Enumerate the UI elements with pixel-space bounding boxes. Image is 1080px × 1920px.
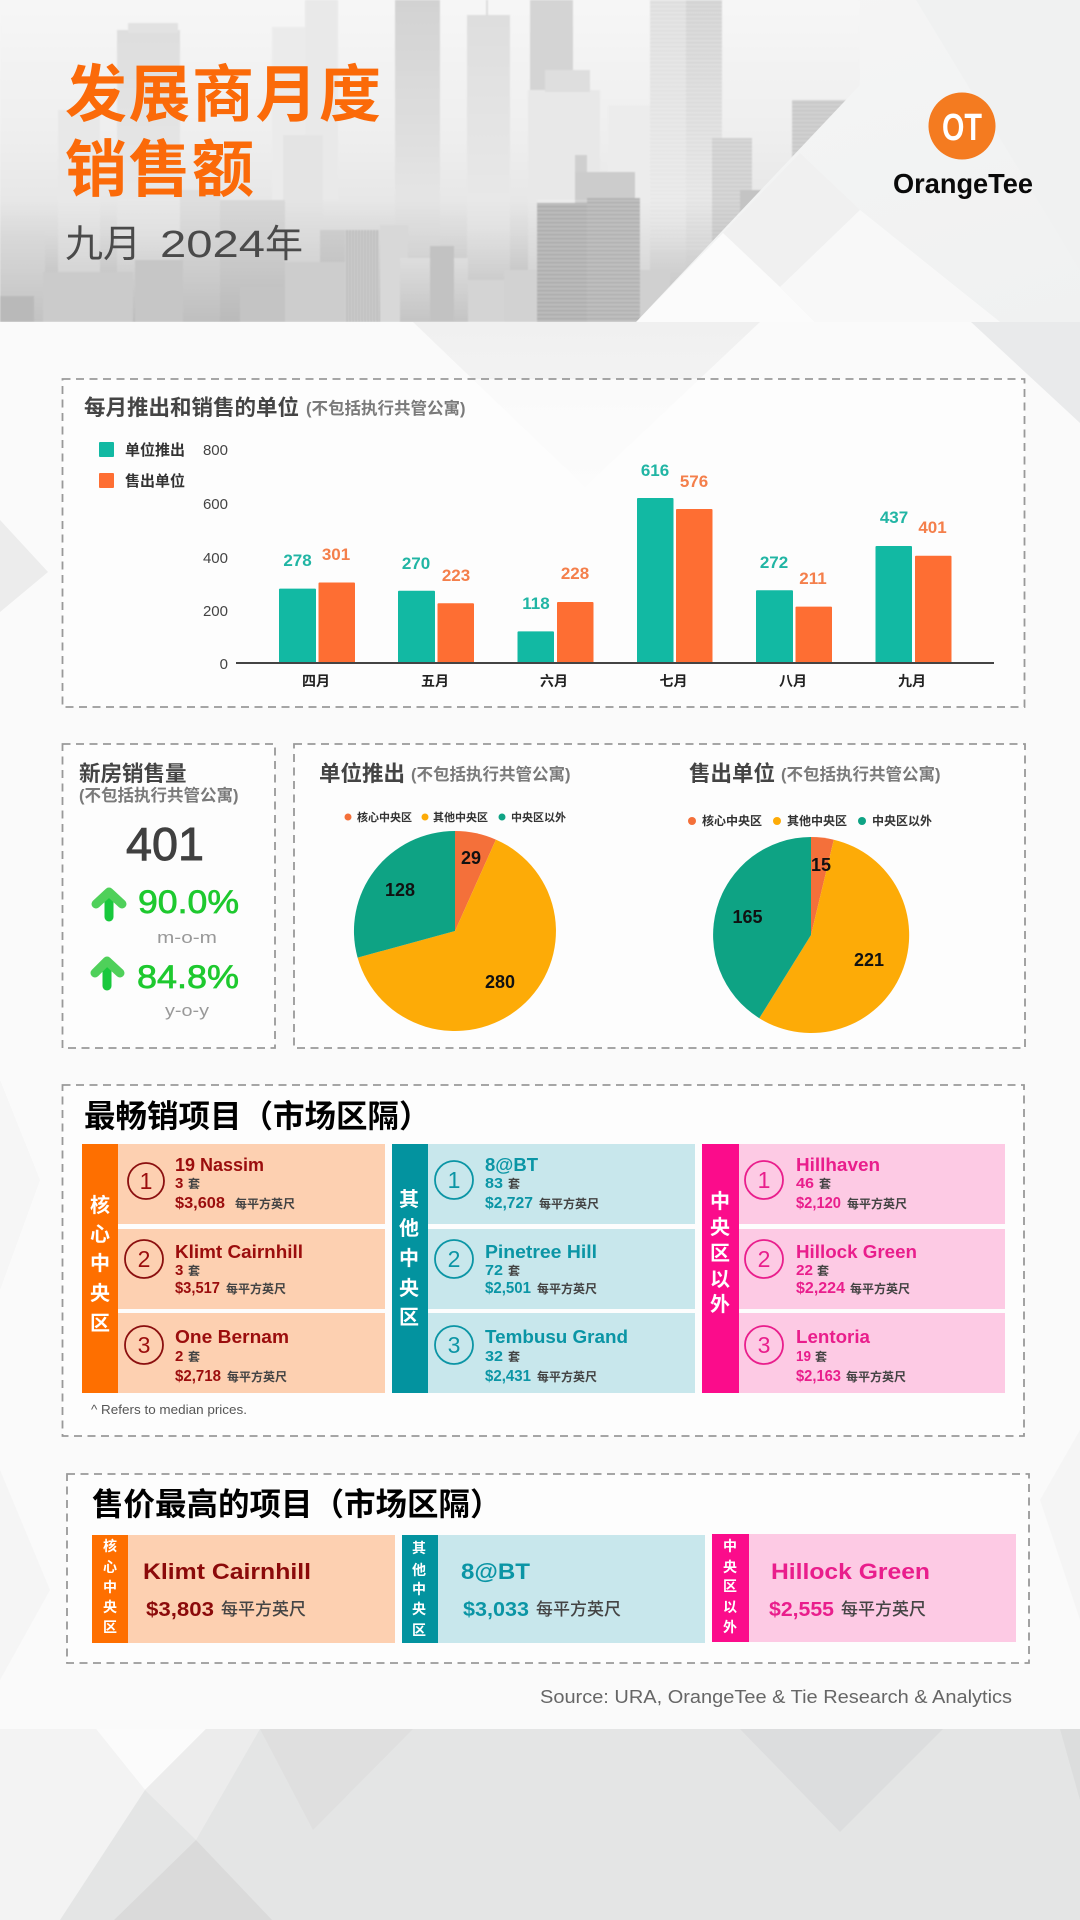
stat: year on year change: 84.8% (137, 959, 239, 995)
bar chart: 七月 (660, 671, 688, 691)
row: Pinetree Hill: 2 (448, 1246, 460, 1272)
row: Lentoria: 每平方英尺 (846, 1368, 906, 1385)
row: Tembusu Grand: Tembusu Grand (485, 1327, 628, 1347)
sidebar label: 区 (412, 1620, 426, 1640)
panel: top selling projects by market segment (62, 1085, 1024, 1436)
chart legend: 售出单位 (125, 470, 185, 491)
sidebar label: 核 (103, 1536, 117, 1556)
heading: new home sales (79, 757, 238, 805)
bar chart: 437 (880, 508, 908, 527)
stat: month on month change: m-o-m (157, 928, 217, 947)
sidebar label: 中 (710, 1185, 730, 1214)
sidebar label: 心 (103, 1557, 117, 1577)
row: 19 Nassim: 1 (140, 1168, 152, 1194)
bar chart: 301 (322, 545, 350, 564)
bottom band pattern (0, 1729, 1080, 1920)
heading: sold units pie: (不包括执行共管公寓) (781, 764, 940, 784)
row: Tembusu Grand: 套 (508, 1348, 520, 1365)
pie chart: sold units: 165 (732, 907, 763, 927)
row: 19 Nassim: $3,608 (175, 1195, 225, 1212)
row: Hillhaven: Hillhaven (796, 1155, 880, 1175)
heading: sold units pie (689, 757, 940, 788)
row: 19 Nassim: 每平方英尺 (235, 1195, 295, 1212)
row: Tembusu Grand (428, 1313, 695, 1393)
title: 发展商月度 (65, 44, 383, 134)
sidebar label: 中 (103, 1577, 117, 1597)
legend: launched units pie (344, 809, 566, 825)
subtitle: month and year: 2024 (160, 224, 265, 266)
title: 销售额 (65, 119, 256, 209)
panel: market segment pie charts (294, 744, 1025, 1048)
card: core central region: $3,803 (146, 1599, 214, 1621)
row: Tembusu Grand: 3 (448, 1332, 460, 1358)
panel: new home sales (62, 744, 275, 1048)
row: Hillhaven: 每平方英尺 (847, 1195, 907, 1212)
row: Hillhaven: $2,120 (796, 1195, 841, 1212)
row: Pinetree Hill: 套 (508, 1262, 520, 1279)
row: 8@BT: $2,727 (485, 1195, 533, 1212)
column: outside central region (702, 1144, 1005, 1393)
sidebar label: 区 (103, 1617, 117, 1637)
row: One Bernam: 3 (138, 1332, 150, 1358)
row: Lentoria: 3 (758, 1332, 770, 1358)
sidebar label (723, 1536, 737, 1637)
row: One Bernam: 2 (175, 1348, 183, 1365)
legend: sold units pie: 中央区以外 (872, 812, 932, 829)
logo: OrangeTee: OrangeTee (893, 168, 1033, 199)
bar chart: 223 (442, 566, 470, 585)
pie chart: launched units: 128 (385, 880, 415, 900)
sidebar label: 区 (90, 1307, 110, 1336)
row: Lentoria: 19 (796, 1348, 811, 1365)
row: 8@BT: 83 (485, 1175, 503, 1192)
bar chart: 六月 (540, 671, 568, 691)
chart legend (99, 439, 185, 491)
bar chart: 272 (760, 553, 788, 572)
legend: sold units pie: 核心中央区 (702, 812, 762, 829)
sidebar label: 区 (710, 1237, 730, 1266)
sidebar label (399, 1183, 419, 1330)
title (65, 44, 383, 209)
bar chart: 118 (522, 594, 550, 613)
row: Hillock Green: 2 (758, 1246, 770, 1272)
panel: highest priced projects by market segment (67, 1474, 1029, 1663)
sidebar label: 央 (723, 1557, 737, 1577)
skyline photo header (0, 0, 860, 322)
heading: monthly units: 每月推出和销售的单位 (84, 391, 299, 422)
bar chart: 401 (918, 518, 947, 537)
row: Klimt Cairnhill: 2 (138, 1246, 150, 1272)
row: 8@BT: 套 (508, 1175, 520, 1192)
heading: launched units pie (319, 757, 570, 788)
card: core central region: Klimt Cairnhill (143, 1559, 311, 1584)
row: Hillhaven: 46 (796, 1175, 814, 1192)
pie chart: launched units (354, 831, 556, 1031)
row: Klimt Cairnhill: Klimt Cairnhill (175, 1242, 303, 1262)
subtitle: month and year (65, 213, 303, 268)
bar chart (203, 442, 994, 691)
heading: new home sales: 新房销售量 (79, 757, 187, 788)
sidebar label: 中 (399, 1242, 419, 1271)
row: 8@BT: 每平方英尺 (539, 1195, 599, 1212)
row: Tembusu Grand: 每平方英尺 (537, 1368, 597, 1385)
row: Pinetree Hill (428, 1229, 695, 1309)
row: Pinetree Hill: 72 (485, 1262, 503, 1279)
row: Hillock Green: 每平方英尺 (850, 1280, 910, 1297)
sidebar label: 他 (412, 1560, 426, 1580)
heading: highest priced projects: 售价最高的项目（市场区隔） (92, 1479, 502, 1525)
sidebar label (90, 1189, 110, 1336)
row: Hillock Green: $2,224 (796, 1280, 845, 1297)
heading: monthly units (84, 391, 466, 422)
heading: new home sales: (不包括执行共管公寓) (79, 785, 238, 805)
sidebar label: 区 (723, 1576, 737, 1596)
pie chart: sold units (713, 837, 909, 1033)
legend: sold units pie (688, 812, 932, 829)
bar chart: 五月 (421, 671, 449, 691)
row: One Bernam: One Bernam (175, 1327, 289, 1347)
panel: monthly launched and sold units (62, 379, 1024, 707)
column: rest of central region (392, 1144, 695, 1393)
sidebar label: 外 (710, 1288, 730, 1317)
card: core central region: 每平方英尺 (221, 1595, 306, 1620)
row: Lentoria: $2,163 (796, 1368, 841, 1385)
sidebar label: 其 (412, 1538, 426, 1558)
card: outside central region (712, 1534, 1016, 1642)
card: outside central region: 每平方英尺 (841, 1595, 926, 1620)
stat: month on month change (138, 884, 239, 947)
row: 19 Nassim (118, 1144, 385, 1224)
stat: year on year change: y-o-y (165, 1001, 210, 1020)
logo: OrangeTee: OT (942, 107, 982, 149)
heading: sold units pie: 售出单位 (689, 757, 775, 788)
row: Pinetree Hill: $2,501 (485, 1280, 531, 1297)
sidebar label: 央 (399, 1272, 419, 1301)
bar chart: 0 (220, 656, 228, 673)
sidebar label: 外 (723, 1617, 737, 1637)
bar chart: 228 (561, 564, 589, 583)
row: Hillock Green (739, 1229, 1005, 1309)
subtitle: month and year: 年 (265, 213, 303, 268)
heading: top selling projects: 最畅销项目（市场区隔） (84, 1091, 431, 1137)
row: Pinetree Hill: 每平方英尺 (537, 1280, 597, 1297)
row: Tembusu Grand: $2,431 (485, 1368, 531, 1385)
row: 19 Nassim: 19 Nassim (175, 1155, 264, 1175)
pie chart: sold units: 15 (811, 855, 831, 875)
bar chart: 600 (203, 496, 228, 513)
column: core central region (82, 1144, 385, 1393)
card: rest of central region (402, 1535, 705, 1643)
sidebar label: 央 (412, 1599, 426, 1619)
row: 19 Nassim: 套 (188, 1175, 200, 1192)
stat: month on month change: 90.0% (138, 884, 239, 920)
sidebar label: 中 (90, 1247, 110, 1276)
card: core central region (92, 1535, 395, 1643)
row: Klimt Cairnhill: 3 (175, 1262, 183, 1279)
row: Klimt Cairnhill: $3,517 (175, 1280, 220, 1297)
row: Lentoria: Lentoria (796, 1327, 871, 1347)
stat: year on year change (137, 959, 239, 1020)
source note: Source: URA, OrangeTee & Tie Research & Analytics (540, 1687, 1012, 1707)
row: Hillhaven: 套 (819, 1175, 831, 1192)
footnote: ^ Refers to median prices. (91, 1403, 247, 1417)
sidebar label: 他 (399, 1212, 419, 1241)
pie chart: launched units: 29 (461, 848, 481, 868)
sidebar label (412, 1538, 426, 1640)
row: Hillock Green: Hillock Green (796, 1242, 917, 1262)
card: rest of central region: 每平方英尺 (536, 1595, 621, 1620)
row: Hillock Green: 22 (796, 1262, 813, 1279)
heading: launched units pie: (不包括执行共管公寓) (411, 764, 570, 784)
icon: up arrow month on month (96, 892, 122, 917)
logo: OrangeTee (893, 92, 1033, 199)
sidebar label: 中 (412, 1579, 426, 1599)
icon: up arrow year on year (95, 961, 120, 986)
card: rest of central region: 8@BT (461, 1559, 531, 1584)
row: Lentoria (739, 1313, 1005, 1393)
row: 19 Nassim: 3 (175, 1175, 183, 1192)
bar chart: 211 (799, 569, 827, 588)
legend: launched units pie: 核心中央区 (357, 809, 412, 825)
bar chart: 616 (641, 461, 669, 480)
row: Hillock Green: 套 (817, 1262, 829, 1279)
row: Hillhaven: 1 (758, 1167, 770, 1193)
total sales number: 401 (126, 818, 204, 870)
sidebar label: 央 (103, 1597, 117, 1617)
bar chart: 200 (203, 603, 228, 620)
bar chart: 四月 (302, 671, 330, 691)
sidebar label: 央 (710, 1211, 730, 1240)
bar chart: 278 (283, 551, 312, 570)
sidebar label: 以 (710, 1263, 730, 1292)
legend: sold units pie: 其他中央区 (787, 812, 847, 829)
sidebar label: 其 (399, 1183, 419, 1212)
chart legend: 单位推出 (125, 439, 185, 460)
row: One Bernam: 套 (188, 1348, 200, 1365)
pie chart: launched units: 280 (485, 972, 515, 992)
sidebar label: 以 (723, 1597, 737, 1617)
row: Pinetree Hill: Pinetree Hill (485, 1242, 597, 1262)
subtitle: month and year: 九月 (65, 213, 141, 268)
row: 8@BT (428, 1144, 695, 1224)
card: outside central region: $2,555 (769, 1599, 834, 1621)
row: Klimt Cairnhill (118, 1229, 385, 1309)
legend: launched units pie: 其他中央区 (433, 809, 488, 825)
bar chart: 八月 (779, 671, 807, 691)
sidebar label: 中 (723, 1536, 737, 1556)
sidebar label: 心 (90, 1218, 110, 1247)
legend: launched units pie: 中央区以外 (511, 809, 566, 825)
row: Klimt Cairnhill: 每平方英尺 (226, 1280, 286, 1297)
row: Klimt Cairnhill: 套 (188, 1262, 200, 1279)
heading: monthly units: (不包括执行共管公寓) (306, 398, 466, 418)
card: rest of central region: $3,033 (463, 1599, 529, 1621)
sidebar label (103, 1536, 117, 1637)
bar chart: 800 (203, 442, 228, 459)
sidebar label: 区 (399, 1301, 419, 1330)
row: Lentoria: 套 (815, 1348, 827, 1365)
sidebar label (710, 1185, 730, 1317)
row: One Bernam: $2,718 (175, 1368, 221, 1385)
bar chart: 400 (203, 550, 228, 567)
bar chart: 270 (402, 554, 430, 573)
sidebar label: 央 (90, 1277, 110, 1306)
bar chart: 576 (680, 472, 708, 491)
row: Tembusu Grand: 32 (485, 1348, 503, 1365)
row: One Bernam (118, 1313, 385, 1393)
row: Hillhaven (739, 1144, 1005, 1224)
row: 8@BT: 1 (448, 1167, 460, 1193)
pie chart: sold units: 221 (854, 950, 884, 970)
bar chart: 九月 (898, 671, 926, 691)
heading: launched units pie: 单位推出 (319, 757, 405, 788)
sidebar label: 核 (90, 1189, 110, 1218)
row: 8@BT: 8@BT (485, 1155, 538, 1175)
card: outside central region: Hillock Green (771, 1559, 930, 1584)
row: One Bernam: 每平方英尺 (227, 1368, 287, 1385)
